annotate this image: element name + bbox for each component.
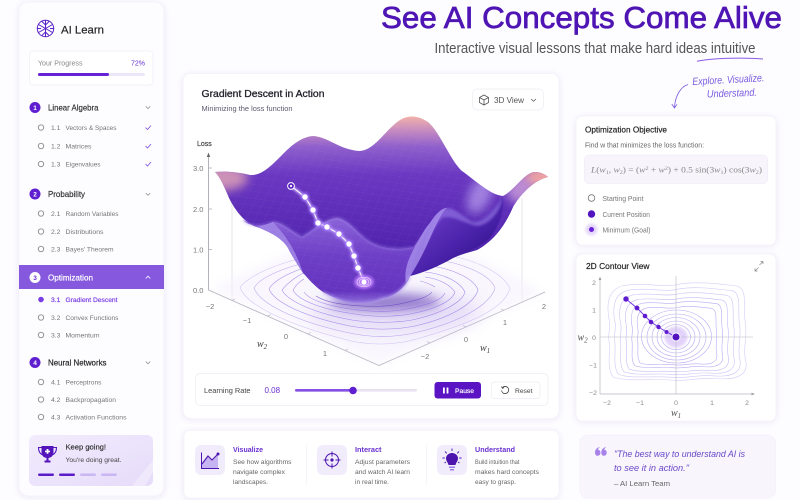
- 3D axes: 1.0: [193, 246, 203, 254]
- 3D axes: 2.0: [193, 205, 203, 214]
- learning rate control bar: 0.08: [264, 386, 281, 395]
- section: Neural Networks: Neural Networks: [48, 358, 106, 368]
- learning rate control bar: [196, 374, 548, 406]
- section: Probability: 2.3: [51, 246, 61, 254]
- icon: target: [324, 452, 340, 468]
- surface: right dark flank: [400, 196, 513, 276]
- section: Optimization (active): 3.1: [51, 297, 61, 304]
- contour plot: [578, 276, 755, 420]
- title: See AI Concepts Come Alive: [381, 0, 782, 35]
- formula box: ) = (: [623, 164, 639, 174]
- feature: understand: makes hard concepts: [475, 469, 540, 476]
- panel: optimization objective: Find w that minimizes the loss function:: [585, 142, 704, 150]
- 3D axes: 0.0: [193, 286, 203, 295]
- formula box: 2: [620, 170, 623, 176]
- chart subheading: Minimizing the loss function: [202, 104, 292, 113]
- chart heading: Gradient Descent in Action: [202, 88, 325, 100]
- 3D axes: [193, 141, 546, 366]
- section: Neural Networks: 4.1: [51, 380, 61, 386]
- formula box: 1: [606, 170, 609, 176]
- 3D axes: −2: [206, 302, 214, 311]
- section: Probability: Bayes' Theorem: [66, 246, 114, 254]
- section: Linear Algebra: Linear Algebra: [48, 103, 99, 112]
- 3D axes: −2: [421, 352, 429, 361]
- 3D axes: 2: [264, 343, 268, 351]
- section: Neural Networks: 4.2: [51, 397, 61, 404]
- section: Linear Algebra: 1.1: [51, 125, 61, 132]
- feature: interact: [317, 445, 411, 486]
- icon: quote mark: [595, 447, 607, 456]
- pause button: [434, 382, 481, 398]
- progress card: [30, 51, 153, 85]
- panel: gradient descent 3D chart: [183, 74, 569, 418]
- 3D axes: 3.0: [193, 164, 203, 173]
- descent path: [288, 183, 374, 289]
- section: Probability: [30, 188, 150, 254]
- section: Linear Algebra: [30, 102, 151, 168]
- section: Optimization (active): Momentum: [66, 332, 100, 340]
- 3D axes: Loss: [197, 141, 212, 148]
- formula box: 2: [645, 166, 649, 172]
- formula box: ,: [609, 164, 613, 174]
- handwritten callout: Understand.: [707, 87, 757, 100]
- brand name: AI Learn: [61, 24, 104, 36]
- section: Neural Networks: Perceptrons: [66, 380, 102, 386]
- formula box: w: [639, 164, 646, 174]
- floor contours: [210, 248, 545, 365]
- section: Neural Networks: [30, 357, 150, 422]
- pause button: Pause: [455, 388, 474, 395]
- formula box: 2: [665, 166, 668, 172]
- icon: trophy: [38, 446, 56, 462]
- reset button: [492, 382, 540, 398]
- panel: quote: [580, 435, 776, 498]
- section: Linear Algebra: Matrices: [66, 143, 92, 150]
- section: Optimization (active): Optimization: [48, 274, 93, 282]
- section: Optimization (active): 3.2: [51, 315, 61, 322]
- panel: optimization objective: [576, 116, 776, 245]
- feature: interact: in real time.: [355, 479, 389, 486]
- 3D axes: 0: [284, 332, 288, 341]
- 3D axes: 1: [323, 349, 327, 358]
- icon: line chart: [202, 452, 220, 468]
- surface: dark right flank over bowl: [410, 197, 503, 276]
- progress card: 72%: [131, 60, 145, 68]
- learning rate control bar: Learning Rate: [204, 386, 250, 395]
- section: Optimization (active): 3: [33, 275, 37, 282]
- formula box: [584, 155, 768, 184]
- formula box: w: [659, 164, 665, 174]
- contour plot: 2: [745, 400, 749, 407]
- icon: expand: [755, 262, 763, 271]
- panel: quote: to see it in action.": [614, 463, 690, 473]
- handwritten callout: [672, 72, 765, 108]
- feature: understand: easy to grasp.: [475, 479, 516, 486]
- section: Neural Networks: 4: [33, 360, 37, 367]
- section: Optimization (active): 3.3: [51, 332, 61, 340]
- panel: quote: – AI Learn Team: [614, 479, 670, 488]
- contour plot: 1: [678, 412, 681, 420]
- section: Linear Algebra: Vectors & Spaces: [66, 125, 117, 132]
- surface: lavender crest highlights: [405, 208, 447, 283]
- section: Neural Networks: Backpropagation: [66, 397, 116, 404]
- 3D axes: w: [257, 339, 264, 350]
- section: Linear Algebra: Eigenvalues: [66, 162, 101, 168]
- section: Probability: 2.2: [51, 229, 61, 236]
- subtitle: Interactive visual lessons that make hard ideas intuitive: [434, 41, 756, 57]
- panel: course sidebar: [19, 2, 164, 496]
- panel: optimization objective: Optimization Objective: [585, 126, 667, 134]
- feature: understand: [437, 445, 540, 486]
- contour plot: w: [578, 332, 584, 344]
- contour plot: 2: [584, 336, 588, 344]
- section: Linear Algebra: 1: [33, 105, 37, 112]
- feature: visualize: landscapes.: [233, 479, 268, 486]
- section: Neural Networks: 4.3: [51, 414, 61, 422]
- section: Probability: Probability: [48, 190, 86, 199]
- panel: 2D contour view: 2D Contour View: [586, 262, 650, 271]
- section: Probability: 2.1: [51, 211, 61, 218]
- formula box: ) cos(3: [724, 164, 750, 174]
- formula box: 2: [756, 170, 759, 176]
- icon: brain logo: [37, 20, 54, 37]
- feature: understand: Understand: [475, 445, 515, 454]
- contour plot: 1: [592, 308, 596, 314]
- section: Optimization (active): Gradient Descent: [66, 297, 118, 304]
- progress card: Your Progress: [38, 60, 83, 68]
- feature: visualize: navigate complex: [233, 469, 286, 476]
- handwritten callout: Explore. Visualize.: [692, 72, 765, 88]
- formula box: w: [714, 164, 721, 174]
- formula box: L(w: [591, 164, 605, 174]
- 3D axes: 0: [464, 335, 468, 344]
- 3D axes: 1: [503, 318, 507, 327]
- feature: visualize: See how algorithms: [233, 459, 292, 466]
- formula box: w: [613, 164, 620, 174]
- formula box: +: [648, 164, 659, 174]
- feature: visualize: [195, 445, 292, 486]
- legend: Minimum (Goal): [602, 227, 650, 234]
- contour plot: −1: [589, 362, 597, 370]
- contour plot: 0: [592, 335, 596, 342]
- 3D view dropdown: [472, 89, 544, 110]
- legend: [586, 195, 650, 236]
- contour plot: w: [671, 408, 678, 419]
- section: Linear Algebra: 1.2: [51, 143, 61, 150]
- arrow: callout to objective: [672, 84, 688, 108]
- formula box: w: [750, 164, 756, 174]
- reset button: Reset: [515, 388, 533, 395]
- encouragement card: [29, 435, 153, 486]
- contour plot: 2: [592, 280, 596, 287]
- 3D loss surface: [215, 116, 548, 304]
- section: Optimization (active): Convex Functions: [66, 315, 119, 322]
- section: Linear Algebra: 1.3: [51, 162, 61, 168]
- feature: interact: Adjust parameters: [355, 459, 411, 466]
- 3D axes: −1: [243, 316, 251, 325]
- section: Probability: Distributions: [66, 229, 104, 236]
- contour plot: −1: [636, 400, 644, 407]
- panel: 2D contour view: [576, 254, 776, 421]
- panel: feature strip: [184, 430, 559, 498]
- legend: Starting Point: [602, 196, 644, 203]
- section: Neural Networks: Activation Functions: [66, 414, 127, 422]
- feature: interact: Interact: [355, 445, 382, 454]
- surface: front ridge and bowl: [243, 208, 447, 303]
- panel: quote: "The best way to understand AI is: [614, 449, 746, 459]
- contour plot: −2: [589, 390, 597, 397]
- section: Probability: Random Variables: [66, 211, 119, 218]
- 3D axes: 2: [542, 302, 546, 311]
- contour plot: −2: [603, 400, 611, 407]
- 3D axes: w: [480, 343, 487, 354]
- surface: back sheet: [215, 116, 548, 250]
- encouragement card: Keep going!: [66, 442, 106, 452]
- legend: Current Position: [602, 212, 650, 219]
- section: Probability: 2: [33, 192, 37, 198]
- contour plot: 1: [710, 400, 714, 407]
- formula box: ): [759, 164, 762, 174]
- feature: understand: Build intuition that: [475, 459, 520, 466]
- feature: visualize: Visualize: [233, 445, 263, 454]
- 3D view dropdown: 3D View: [494, 96, 524, 105]
- encouragement card: You're doing great.: [66, 457, 122, 464]
- formula box: 1: [721, 170, 724, 176]
- feature: interact: and watch AI learn: [355, 469, 410, 476]
- contour plot: 0: [674, 400, 678, 407]
- section: Optimization (active): [19, 265, 164, 340]
- formula box: ) + 0.5 sin(3: [668, 164, 714, 174]
- icon: light bulb: [442, 448, 462, 470]
- slider: [295, 387, 417, 394]
- 3D axes: 1: [487, 347, 490, 355]
